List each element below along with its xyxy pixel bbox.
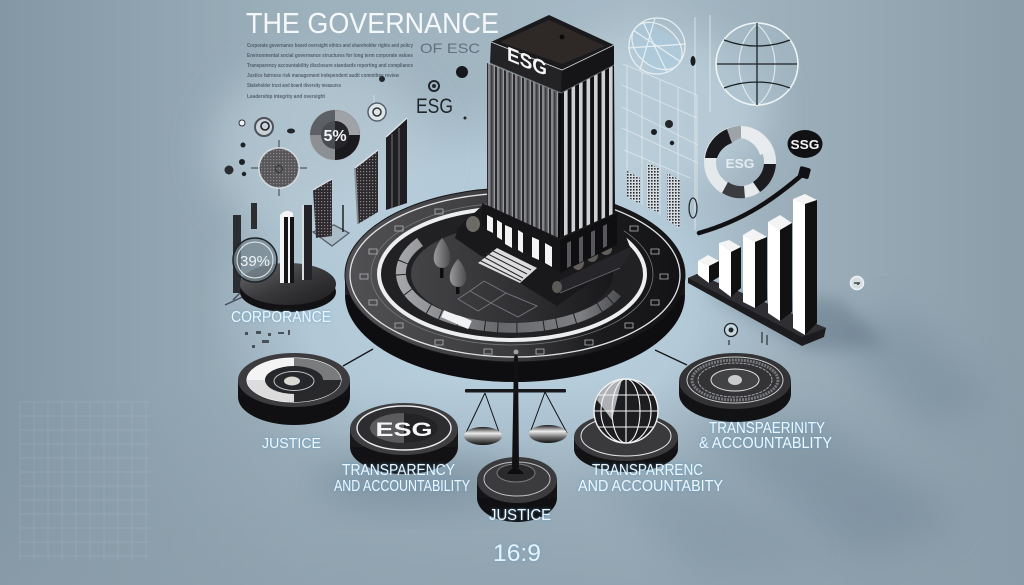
- label: justice centre: JUSTICE: [489, 507, 551, 524]
- scales of justice: [464, 350, 567, 522]
- icon: radar wheel: [623, 13, 691, 79]
- left podium with columns: 39%: [240, 253, 270, 270]
- label: transparency and accountability right: [699, 420, 832, 452]
- building ESG tower: ESG: [507, 43, 547, 81]
- medallion right: [679, 353, 791, 422]
- body text block: Justice fairness risk management independent audit committee review: [247, 73, 400, 79]
- left small buildings: [313, 118, 407, 246]
- ratio label: 16:9: [493, 540, 541, 567]
- trend arrow: [699, 166, 811, 233]
- pie chart 5%: [310, 110, 360, 160]
- small icon below chart: [724, 324, 767, 345]
- label: transparency and accountability right: & ACCOUNTABLITY: [699, 435, 832, 452]
- ESG dark label: ESG: [416, 95, 453, 118]
- trees: [434, 238, 466, 294]
- icon: small dots and markers top: [224, 66, 468, 176]
- label: corporance: CORPORANCE: [231, 309, 331, 326]
- left podium with columns: [225, 203, 336, 312]
- label: transparency and accountability centre: [578, 462, 723, 495]
- icon: large globe: [716, 23, 798, 106]
- small marks under corporance: [245, 330, 290, 348]
- medallion left: [238, 353, 350, 425]
- body text block: Leadership integrity and oversight: [247, 94, 325, 100]
- donut chart ESG: [705, 126, 776, 198]
- ESG dark label: [416, 81, 453, 118]
- label: transparency and accountability right: TRANSPAERINITY: [709, 420, 825, 437]
- label: transparency and accountability left: AND ACCOUNTABILITY: [334, 478, 470, 495]
- body text block: Environmental social governance structures for long term corporate values: [247, 53, 413, 59]
- SSG badge: SSG: [790, 137, 820, 152]
- subtitle: OF ESC: [420, 40, 480, 56]
- label: transparency and accountability centre: AND ACCOUNTABITY: [578, 478, 723, 495]
- 3D bar chart: [688, 194, 826, 346]
- label: transparency and accountability left: TRANSPARENCY: [342, 462, 455, 479]
- ESG button: [350, 403, 458, 474]
- label: transparency and accountability centre: TRANSPARRENC: [592, 462, 703, 479]
- body text block: [247, 43, 414, 100]
- icon: key circle: [850, 276, 864, 290]
- donut chart ESG: ESG: [726, 156, 754, 171]
- SSG badge: [788, 130, 822, 158]
- building ESG tower: [482, 15, 617, 273]
- grid panel top right: [622, 15, 710, 230]
- connector lines: [343, 349, 687, 366]
- pie chart 5%: 5%: [323, 128, 347, 145]
- bar chart shadow: [700, 290, 885, 350]
- reticle icon: [251, 140, 307, 196]
- central platform: [345, 188, 685, 382]
- body text block: Corporate governance board oversight ethics and shareholder rights and policy: [247, 43, 414, 49]
- body text block: Stakeholder trust and board diversity measures: [247, 83, 341, 89]
- title: THE GOVERNANCE: [246, 8, 499, 40]
- faint grid bottom left: [20, 402, 150, 560]
- ESG button: ESG: [376, 420, 432, 441]
- label: transparency and accountability left: [334, 462, 470, 495]
- body text block: Transparency accountability disclosure standards reporting and compliance: [247, 63, 413, 69]
- plaza inlays: [458, 281, 537, 317]
- globe button: [574, 379, 678, 472]
- label: justice left: JUSTICE: [262, 435, 321, 452]
- building base steps: [455, 205, 630, 306]
